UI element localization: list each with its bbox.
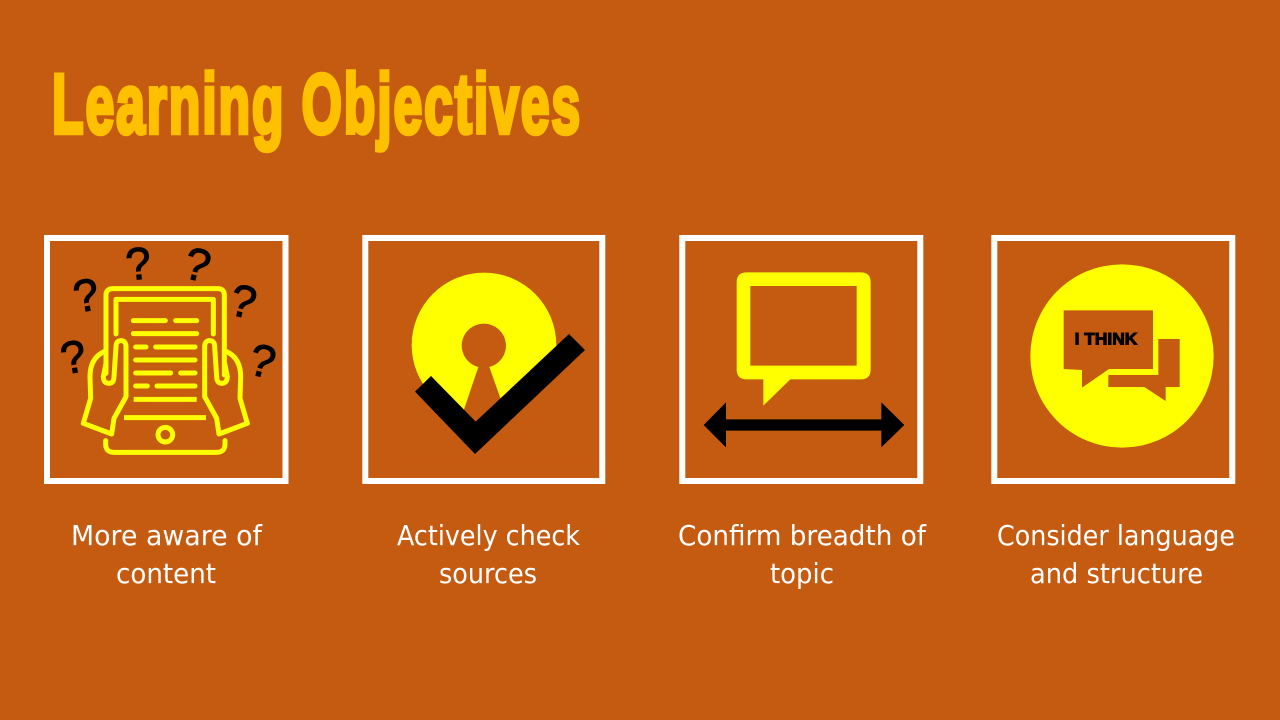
caption: more aware of content: content (116, 557, 216, 590)
icon frame: keyhole (365, 238, 602, 481)
icon: hands holding tablet with question marks: ? (225, 274, 262, 329)
caption: consider language and structure: and structure (1030, 557, 1203, 590)
icon: speech bubble above double arrow (704, 272, 904, 447)
caption: confirm breadth of topic: topic (770, 557, 834, 590)
caption: consider language and structure (997, 519, 1235, 590)
icon frame: tablet (47, 238, 286, 481)
icon: I think speech bubbles: I THINK (1075, 330, 1138, 349)
icon frame: I think (994, 238, 1232, 481)
caption: actively check sources (397, 519, 581, 590)
caption: actively check sources: sources (439, 557, 537, 590)
caption: actively check sources: Actively check (397, 519, 581, 552)
caption: confirm breadth of topic (678, 519, 927, 590)
icon: hands holding tablet with question marks: ? (57, 330, 90, 384)
title: Learning Objectives (52, 57, 582, 151)
icon: hands holding tablet with question marks: ? (123, 237, 154, 291)
caption: more aware of content (71, 519, 263, 590)
caption: confirm breadth of topic: Confirm breadth of (678, 519, 927, 552)
icon: keyhole with check mark (405, 273, 588, 463)
icon: hands holding tablet with question marks (57, 237, 281, 452)
icon: hands holding tablet with question marks: ? (69, 268, 103, 323)
icon: hands holding tablet with question marks: ? (244, 333, 281, 389)
panel: confirm breadth of topic (678, 238, 927, 590)
caption: more aware of content: More aware of (71, 519, 263, 552)
panel: consider language and structure (994, 238, 1235, 590)
icon: I think speech bubbles (1030, 264, 1214, 448)
icon: hands holding tablet with question marks: ? (179, 237, 216, 293)
panel: more aware of content (47, 237, 286, 590)
icon frame: speech bubble (682, 238, 920, 481)
panel: actively check sources (365, 238, 602, 590)
caption: consider language and structure: Consider language (997, 519, 1235, 552)
